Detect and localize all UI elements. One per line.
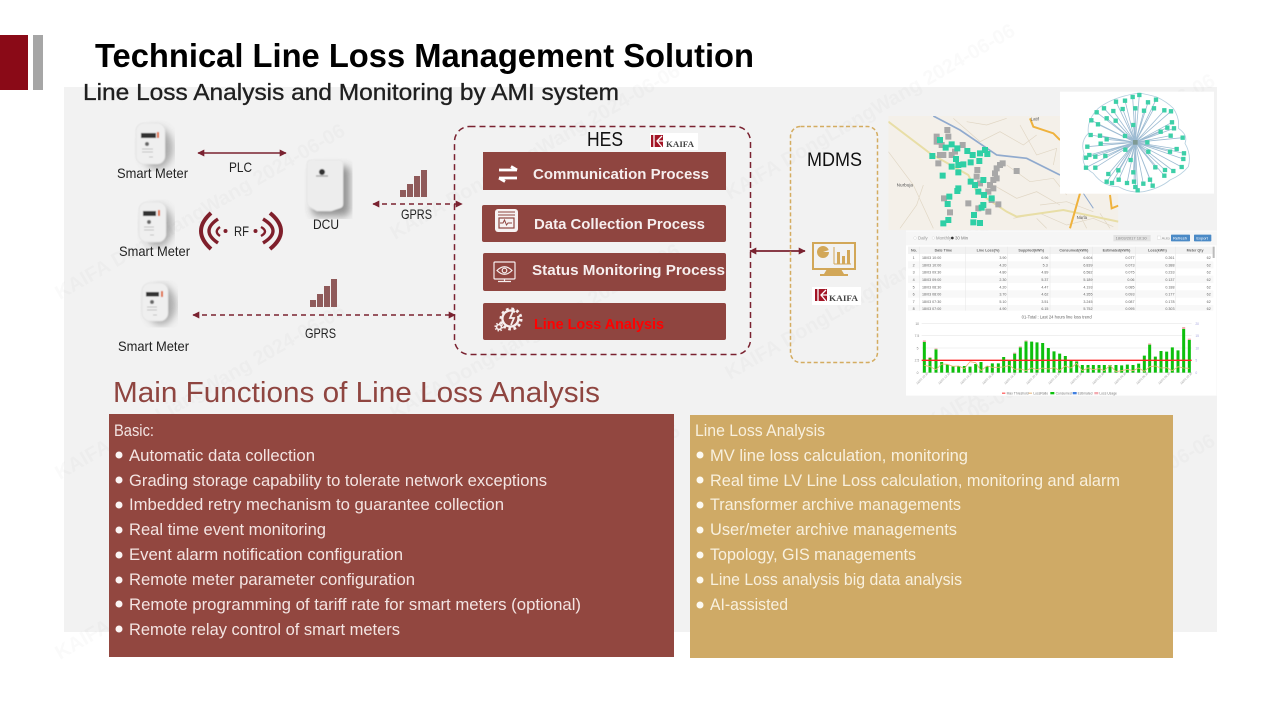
data table: 5 (913, 285, 915, 289)
x axis tick labels (915, 371, 1193, 385)
RF wireless icon (201, 213, 281, 249)
map terrain texture (888, 118, 1113, 228)
data table: 8 (913, 307, 915, 311)
label: GPRS upper: GPRS (401, 206, 432, 222)
panel title: Line Loss Analysis: Line Loss Analysis (695, 422, 825, 440)
data table: 0.303 (1165, 307, 1174, 311)
map roads (888, 122, 1118, 222)
chart legend: LossRatio (1033, 391, 1048, 395)
data table: 0.188 (1165, 285, 1174, 289)
x axis tick labels: 18/03 02:30 (1091, 371, 1105, 385)
data table: 18/03 10:00 (922, 256, 941, 260)
data table: 4.90 (999, 307, 1006, 311)
data table: 0.087 (1125, 300, 1134, 304)
process row: communication: Communication Process (533, 166, 709, 183)
smart meter 1 (136, 123, 173, 169)
GIS map screenshot: Nurla (1077, 215, 1088, 220)
watermark: KAIFA DongLiangWang 2024-06-06 (386, 240, 684, 424)
analysis function list: Topology, GIS managements (710, 546, 916, 564)
process row: status monitoring: Status Monitoring Process (532, 262, 725, 279)
basic function list: Automatic data collection (129, 447, 315, 465)
data table: 62 (1207, 263, 1211, 267)
data table: 0.093 (1125, 293, 1134, 297)
data table: 5.10 (999, 300, 1006, 304)
label: smart meter 3: Smart Meter (118, 338, 189, 354)
data table: 5.189 (1083, 278, 1092, 282)
data table: 62 (1207, 285, 1211, 289)
smart meter 3 (142, 283, 176, 325)
data table: 18/03 07:30 (922, 300, 941, 304)
watermark: KAIFA DongLiangWang 2024-06-06 (52, 300, 349, 484)
data table: 2.30 (999, 278, 1006, 282)
GIS map screenshot (888, 116, 1118, 230)
data table: 6.604 (1083, 256, 1092, 260)
analysis function list: User/meter archive managements (710, 521, 957, 539)
label: smart meter 1: Smart Meter (117, 165, 188, 181)
watermark: KAIFA DongLiangWang 2024-06-06 (922, 250, 1219, 434)
label: DCU: DCU (313, 216, 339, 232)
data table: 4.193 (1083, 285, 1092, 289)
data table: 6.582 (1083, 270, 1092, 274)
data table: 0.177 (1165, 293, 1174, 297)
x axis tick labels: 18/02 14:30 (959, 371, 973, 385)
toolbar: Export (1196, 235, 1209, 240)
chart title: 01-Total : Last 24 hours line loss trend (1022, 315, 1092, 320)
basic function list: Remote meter parameter configuration (129, 571, 415, 589)
map teal markers (932, 140, 992, 223)
label: GPRS lower: GPRS (305, 325, 336, 341)
data table: 4.47 (1041, 285, 1048, 289)
analysis function list (710, 447, 1120, 614)
data table: 0.06 (1127, 278, 1134, 282)
topology hub (1133, 140, 1138, 145)
data table: 18/03 09:30 (922, 270, 941, 274)
data table: 0.085 (1125, 285, 1134, 289)
watermark: KAIFA DongLiangWang 2024-06-06 (722, 380, 1019, 564)
label: smart meter 2: Smart Meter (119, 243, 190, 259)
data table: 7 (913, 300, 915, 304)
panel: line loss analysis functions (690, 415, 1173, 658)
process row: status monitoring (483, 253, 726, 291)
background panel (64, 87, 1217, 632)
subtitle: Line Loss Analysis and Monitoring by AMI system (83, 79, 619, 105)
line loss bar chart: 2.5 (915, 359, 919, 363)
x axis tick labels: 18/03 04:30 (1113, 371, 1127, 385)
loss ratio line (924, 362, 1189, 372)
icon: monitor with eye (494, 262, 515, 282)
data table: 5.752 (1083, 307, 1092, 311)
HES dashed frame (454, 126, 750, 354)
data table: Date Time (935, 249, 952, 253)
label: RF: RF (234, 223, 249, 239)
line loss bar chart: 5 (917, 346, 919, 350)
signal bars icon: DCU to HES (400, 170, 427, 197)
toolbar: Auto (1162, 235, 1171, 240)
line loss bar chart (915, 322, 1199, 395)
x axis tick labels: 18/02 12:30 (937, 371, 951, 385)
x axis tick labels: 18/02 22:30 (1047, 371, 1061, 385)
MDMS heading: MDMS (807, 150, 862, 171)
process row: communication (483, 152, 726, 190)
green consumption bars (924, 329, 1189, 373)
data table: 6.15 (1041, 307, 1048, 311)
data table: 4.89 (1041, 270, 1048, 274)
GIS map screenshot: Latif (1031, 116, 1040, 121)
basic function list: Grading storage capability to tolerate network exceptions (129, 472, 547, 490)
basic function list: Event alarm notification configuration (129, 546, 403, 564)
analysis function list: MV line loss calculation, monitoring (710, 447, 968, 465)
data table: 18/03 10:00 (922, 263, 941, 267)
data table: Loss(kWh) (1148, 249, 1167, 253)
icon: exchange arrows (499, 166, 517, 182)
topology spokes (1086, 95, 1184, 190)
line loss bar chart: 10 (915, 322, 919, 326)
analysis function list: Line Loss analysis big data analysis (710, 571, 962, 589)
process row: data collection (482, 205, 726, 242)
chart legend: Max Threshold (1007, 391, 1029, 395)
data table: Estimated(kWh) (1103, 249, 1131, 253)
basic function list (129, 447, 581, 639)
line loss table and chart screenshot (906, 231, 1217, 396)
data table: 62 (1207, 278, 1211, 282)
PLC link arrow (198, 152, 286, 154)
data table: 6.96 (1041, 256, 1048, 260)
process row: line loss analysis: Line Loss Analysis (534, 316, 664, 333)
data table (908, 247, 1215, 311)
x axis tick labels: 18/03 10:30 (1179, 371, 1193, 385)
data table: 3.70 (999, 293, 1006, 297)
map place labels: Nurbuja (897, 182, 913, 187)
chart legend: Loss Usage (1099, 391, 1117, 395)
watermark: KAIFA DongLiangWang 2024-06-06 (722, 20, 1019, 204)
data table: 3.90 (999, 256, 1006, 260)
data table: 0.178 (1165, 300, 1174, 304)
dashed GPRS arrow: meter to HES (193, 314, 455, 316)
watermark: KAIFA DongLiangWang 2024-06-06 (922, 430, 1219, 614)
basic function list: Remote relay control of smart meters (129, 621, 400, 639)
analysis function list: Real time LV Line Loss calculation, monitoring and alarm (710, 472, 1120, 490)
toolbar: Refresh (1173, 235, 1187, 240)
corner accent: grey bar (33, 35, 43, 90)
data table: 4.20 (999, 263, 1006, 267)
watermark: KAIFA DongLiangWang 2024-06-06 (52, 120, 349, 304)
process row: line loss analysis (483, 303, 726, 340)
data table: 0.261 (1165, 256, 1174, 260)
chart legend (1002, 391, 1117, 395)
data table: 1 (913, 256, 915, 260)
title: Technical Line Loss Management Solution (95, 37, 754, 74)
x axis tick labels: 18/03 06:30 (1135, 371, 1149, 385)
toolbar: Monthly (936, 236, 952, 241)
toolbar: 30 Min (955, 236, 969, 241)
data table: 0.233 (1165, 270, 1174, 274)
KAIFA logo: KAIFA (666, 140, 694, 149)
chart legend: Estimated (1078, 391, 1093, 395)
topology outer link curve (1083, 93, 1189, 192)
data table: 5.3 (1043, 263, 1048, 267)
data table: 18/03 07:00 (922, 307, 941, 311)
watermark: KAIFA DongLiangWang 2024-06-06 (386, 60, 684, 244)
dashed GPRS arrow: DCU to HES (373, 203, 462, 205)
chart legend: Consumed (1056, 391, 1072, 395)
signal bars icon: meter to HES (310, 279, 337, 307)
toolbar: Daily (918, 236, 928, 241)
data table: 0.073 (1125, 263, 1134, 267)
topology nodes (1086, 95, 1184, 190)
data table: Consumed(kWh) (1059, 249, 1089, 253)
panel: MDMS (790, 126, 878, 362)
panel: HES (454, 126, 750, 354)
icon: dashboard monitor (813, 243, 855, 276)
MDMS dashed frame (790, 126, 878, 362)
data table: Meter Qty (1187, 249, 1204, 253)
x axis tick labels: 18/03 00:30 (1069, 371, 1083, 385)
watermark: KAIFA DongLiangWang 2024-06-06 (52, 480, 349, 664)
data table: No. (911, 249, 917, 253)
line loss bar chart: 5 (1195, 359, 1197, 363)
data table: 0.388 (1165, 263, 1174, 267)
KAIFA logo (650, 133, 698, 150)
data table: 4.62 (1041, 293, 1048, 297)
data table: 62 (1207, 307, 1211, 311)
analysis function list: AI-assisted (710, 596, 788, 614)
threshold line (922, 358, 1192, 362)
toolbar: 18/03/2017 10:30 (1116, 236, 1147, 241)
process row: data collection: Data Collection Process (534, 216, 705, 233)
data table: 18/03 08:30 (922, 285, 941, 289)
section heading: Main Functions of Line Loss Analysis (113, 377, 600, 409)
data table: 4.80 (999, 270, 1006, 274)
data table: 18/03 09:00 (922, 278, 941, 282)
watermark: KAIFA DongLiangWang 2024-06-06 (722, 200, 1019, 384)
analysis function list: Transformer archive managements (710, 496, 961, 514)
x axis tick labels: 18/02 20:30 (1025, 371, 1039, 385)
toolbar (906, 231, 1217, 245)
line loss bar chart: 0 (917, 371, 919, 375)
HES to MDMS arrow (750, 250, 805, 252)
data table: 3.245 (1083, 300, 1092, 304)
data table: 0.075 (1125, 270, 1134, 274)
smart meter 2 (139, 202, 173, 247)
x axis tick labels: 18/02 18:30 (1003, 371, 1017, 385)
DCU device (307, 160, 350, 216)
data table: 0.095 (1125, 307, 1134, 311)
data table: 3.51 (1041, 300, 1048, 304)
data table: Line Loss(%) (977, 249, 1000, 253)
data table: 6.839 (1083, 263, 1092, 267)
panel: basic functions (109, 414, 674, 657)
watermark: KAIFA DongLiangWang 2024-06-06 (922, 70, 1219, 254)
basic function list: Imbedded retry mechanism to guarantee collection (129, 496, 504, 514)
data table: 62 (1207, 256, 1211, 260)
data table: 4 (913, 278, 915, 282)
HES heading: HES (587, 129, 623, 151)
data table: 18/03 08:00 (922, 293, 941, 297)
line loss bar chart: 10 (1195, 346, 1199, 350)
data table: 3 (913, 270, 915, 274)
label: PLC: PLC (229, 159, 252, 175)
line loss bar chart: 0 (1195, 371, 1197, 375)
data table: 6 (913, 293, 915, 297)
data table: 62 (1207, 270, 1211, 274)
x axis tick labels: 18/02 16:30 (981, 371, 995, 385)
pink loss caps (924, 327, 1189, 358)
KAIFA logo (812, 287, 861, 305)
data table: 62 (1207, 293, 1211, 297)
data table: Supplied(kWh) (1018, 249, 1045, 253)
data table: 62 (1207, 300, 1211, 304)
data table: 0.077 (1125, 256, 1134, 260)
icon: gears with lightning (495, 309, 521, 331)
basic function list: Remote programming of tariff rate for smart meters (optional) (129, 596, 581, 614)
line loss bar chart: 15 (1195, 334, 1199, 338)
bullets (696, 452, 704, 608)
x axis tick labels: 18/03 08:30 (1157, 371, 1171, 385)
panel title: Basic: Basic: (114, 422, 154, 440)
KAIFA logo: KAIFA (829, 294, 858, 303)
data table: 4.20 (999, 285, 1006, 289)
data table: 2 (913, 263, 915, 267)
network topology screenshot (1060, 92, 1214, 194)
corner accent: red block (0, 35, 28, 90)
data table: 4.355 (1083, 293, 1092, 297)
basic function list: Real time event monitoring (129, 521, 326, 539)
watermark: KAIFA DongLiangWang 2024-06-06 (386, 420, 684, 604)
x axis tick labels: 18/02 10:30 (915, 371, 929, 385)
icon: data tablet (495, 209, 518, 232)
bullets (116, 452, 122, 632)
line loss bar chart: 7.5 (915, 334, 919, 338)
line loss bar chart: 20 (1195, 322, 1199, 326)
map gray markers (937, 130, 1017, 212)
data table: 0.137 (1165, 278, 1174, 282)
data table: 5.37 (1041, 278, 1048, 282)
